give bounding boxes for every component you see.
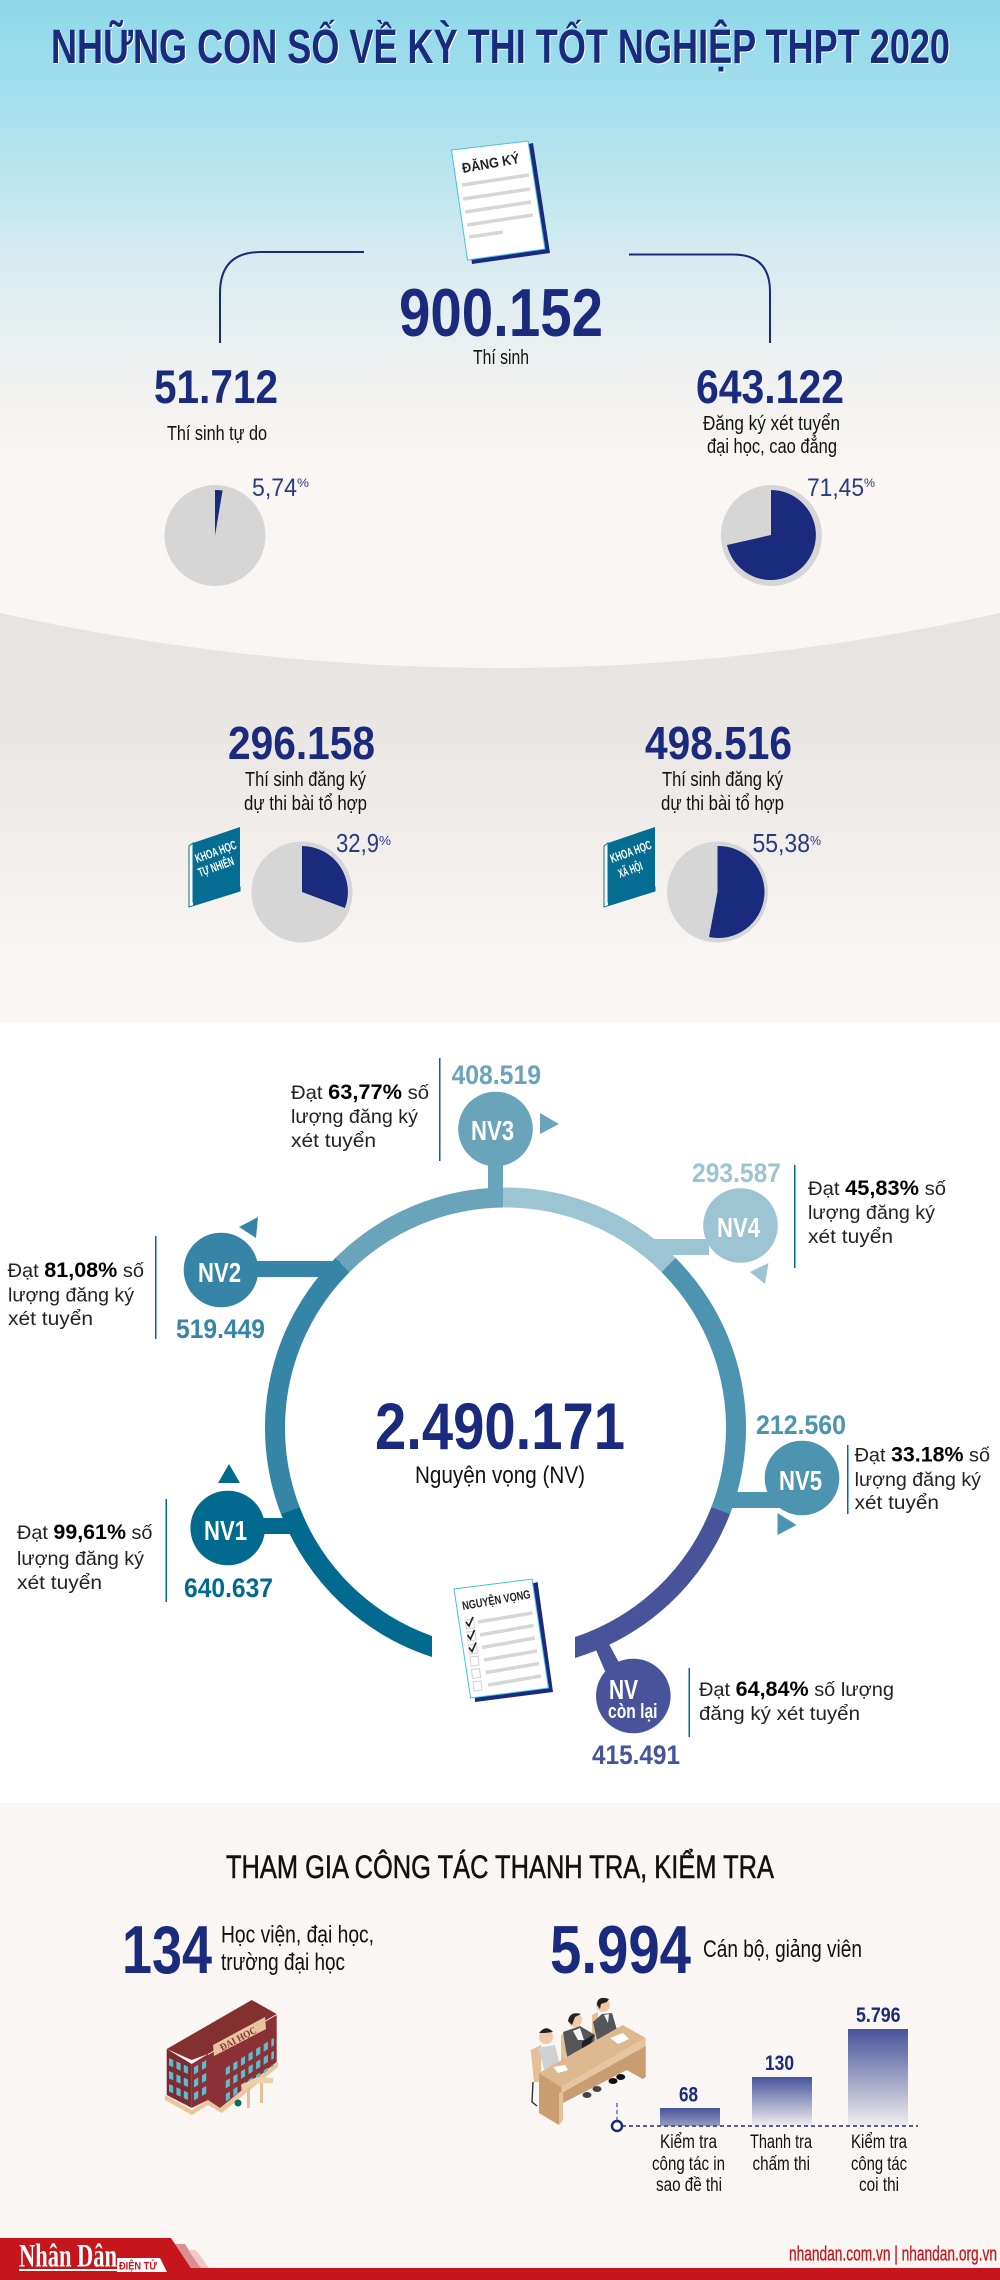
icon: book natural sciences bbox=[189, 827, 240, 907]
footer bbox=[0, 2238, 1000, 2280]
number: 134 bbox=[122, 1912, 212, 1988]
bar: supervision inspection: 5.796 bbox=[856, 2004, 900, 2027]
icon: registration document: ĐĂNG KÝ bbox=[461, 149, 521, 176]
node: remaining wishes: còn lại bbox=[608, 1701, 658, 1723]
pie chart 32,9% bbox=[252, 842, 352, 942]
number: 498.516 bbox=[645, 717, 792, 769]
percent value: % bbox=[297, 476, 309, 490]
icon: university building: ĐẠI HỌC bbox=[218, 2025, 259, 2054]
note: NV1 bbox=[17, 1521, 153, 1594]
bar: print inspection: sao đề thi bbox=[656, 2175, 722, 2196]
axis: dashed baseline bbox=[612, 2103, 918, 2131]
node: NV1: NV1 bbox=[204, 1515, 247, 1546]
panel: independent candidates bbox=[154, 360, 309, 586]
note: remaining wishes: Đạt 64,84% số lượng bbox=[699, 1678, 894, 1701]
node: remaining wishes: 415.491 bbox=[592, 1740, 680, 1770]
section background: sky gradient bbox=[0, 0, 1000, 500]
icon: book social sciences: KHOA HỌC bbox=[608, 838, 653, 866]
node: NV5: NV5 bbox=[779, 1465, 822, 1496]
icon: book social sciences bbox=[604, 827, 655, 907]
label: Thí sinh đăng ký bbox=[662, 769, 783, 791]
label: trường đại học bbox=[221, 1949, 345, 1976]
label: dự thi bài tổ hợp bbox=[661, 793, 784, 815]
percent value: % bbox=[379, 833, 391, 848]
total wishes number: 2.490.171 bbox=[375, 1389, 625, 1463]
node: NV1: 640.637 bbox=[184, 1573, 273, 1603]
note: NV5 bbox=[855, 1444, 990, 1514]
logo text: ĐIỆN TỬ bbox=[119, 2260, 158, 2272]
panel: university admission candidates bbox=[696, 360, 875, 586]
note: NV5: Đạt 33.18% số bbox=[855, 1444, 990, 1467]
bar: print inspection: công tác in bbox=[652, 2154, 725, 2175]
bar: marking inspection: 130 bbox=[765, 2052, 794, 2075]
logo text: Nhân Dân bbox=[19, 2238, 117, 2274]
label bbox=[661, 769, 784, 815]
percent value: 55,38 bbox=[752, 828, 810, 858]
total candidates number: 900.152 bbox=[399, 275, 603, 351]
ring segment NV1 bbox=[281, 1507, 432, 1657]
connector: left bracket bbox=[220, 252, 364, 343]
panel: officials bbox=[531, 1912, 918, 2196]
node: NV2 bbox=[155, 1217, 340, 1344]
note: NV1: lượng đăng ký bbox=[17, 1548, 144, 1570]
chart: wishes ring bbox=[275, 1197, 736, 1658]
note: NV4 bbox=[808, 1177, 946, 1248]
percent value: % bbox=[864, 476, 875, 490]
footer band bbox=[0, 2268, 1000, 2280]
logo stripes bbox=[175, 2244, 201, 2268]
icon: registration document bbox=[452, 141, 550, 264]
logo background bbox=[0, 2238, 191, 2268]
bar: marking inspection: Thanh tra bbox=[750, 2132, 812, 2153]
node: remaining wishes bbox=[592, 1644, 690, 1770]
note: NV4: xét tuyển bbox=[808, 1226, 893, 1248]
pie chart 71,45% bbox=[721, 485, 822, 586]
node: NV3: 408.519 bbox=[452, 1060, 541, 1090]
node: NV4: NV4 bbox=[717, 1212, 760, 1243]
total wishes label: Nguyện vọng (NV) bbox=[415, 1462, 585, 1489]
note: NV3: xét tuyển bbox=[291, 1130, 376, 1152]
number: 51.712 bbox=[154, 360, 278, 413]
bar: marking inspection: chấm thi bbox=[752, 2154, 810, 2175]
node: NV4: 293.587 bbox=[692, 1158, 781, 1188]
note: NV5: lượng đăng ký bbox=[855, 1469, 981, 1491]
icon: book natural sciences: TỰ NHIÊN bbox=[196, 853, 236, 880]
connector: right bracket bbox=[629, 254, 770, 343]
note: NV1: Đạt 99,61% số bbox=[17, 1521, 153, 1544]
node: NV5 bbox=[730, 1410, 848, 1535]
note: NV2 bbox=[8, 1259, 144, 1330]
label: Cán bộ, giảng viên bbox=[703, 1936, 862, 1963]
note: NV4: Đạt 45,83% số bbox=[808, 1177, 946, 1200]
node: NV1 bbox=[166, 1464, 300, 1603]
label: Thí sinh tự do bbox=[167, 423, 267, 445]
note: NV2: lượng đăng ký bbox=[8, 1284, 134, 1306]
pie chart 5,74% bbox=[164, 485, 266, 586]
percent value: 71,45 bbox=[807, 474, 864, 502]
label: Học viện, đại học, bbox=[221, 1922, 374, 1949]
label: đại học, cao đẳng bbox=[707, 434, 837, 458]
label: Thí sinh đăng ký bbox=[245, 769, 366, 791]
node: NV5: 212.560 bbox=[756, 1410, 846, 1440]
icon: wishes document bbox=[454, 1579, 553, 1702]
node: NV3: NV3 bbox=[471, 1115, 514, 1146]
section background: grey curved band bbox=[0, 613, 1000, 1020]
bar: print inspection: 68 bbox=[679, 2084, 698, 2106]
number: 296.158 bbox=[228, 717, 375, 769]
node: NV3 bbox=[439, 1058, 559, 1200]
panel: universities bbox=[122, 1912, 374, 2115]
note: NV1: xét tuyển bbox=[17, 1572, 102, 1594]
panel: natural sciences combination bbox=[189, 717, 391, 942]
icon: university building bbox=[165, 2000, 278, 2115]
icon: wishes document: NGUYỆN VỌNG bbox=[461, 1586, 531, 1613]
percent value: 32,9 bbox=[336, 828, 379, 858]
note: NV4: lượng đăng ký bbox=[808, 1202, 935, 1224]
number: 5.994 bbox=[550, 1912, 691, 1988]
ring segment NV3 bbox=[342, 1198, 503, 1265]
ring segment NV5 bbox=[668, 1265, 736, 1511]
note: NV2: xét tuyển bbox=[8, 1308, 93, 1330]
panel: registration bbox=[220, 141, 770, 369]
node: NV2: 519.449 bbox=[176, 1314, 265, 1344]
ring segment NV4 bbox=[503, 1197, 668, 1265]
percent value: 5,74 bbox=[252, 474, 297, 502]
total candidates label: Thí sinh bbox=[473, 347, 529, 369]
label bbox=[244, 769, 367, 815]
label bbox=[221, 1922, 374, 1976]
label: Đăng ký xét tuyển bbox=[703, 413, 840, 435]
pie chart 55,38% bbox=[667, 842, 768, 942]
section background: white middle bbox=[0, 1022, 1000, 1803]
node: NV4 bbox=[654, 1158, 796, 1284]
note: remaining wishes bbox=[699, 1678, 894, 1725]
bar: print inspection bbox=[652, 2084, 725, 2196]
bar: supervision inspection bbox=[848, 2004, 908, 2196]
ring segment remaining wishes bbox=[575, 1507, 730, 1658]
note: NV2: Đạt 81,08% số bbox=[8, 1259, 144, 1282]
note: NV3 bbox=[291, 1081, 429, 1152]
bar: marking inspection bbox=[750, 2052, 812, 2175]
number: 643.122 bbox=[696, 360, 844, 413]
node: NV2: NV2 bbox=[198, 1257, 241, 1288]
panel: social sciences combination bbox=[604, 717, 821, 942]
node: remaining wishes: NV bbox=[609, 1674, 638, 1705]
note: NV3: lượng đăng ký bbox=[291, 1106, 418, 1128]
ring segment NV2 bbox=[275, 1265, 342, 1511]
note: NV5: xét tuyển bbox=[855, 1492, 939, 1514]
label: dự thi bài tổ hợp bbox=[244, 793, 367, 815]
bar: print inspection: Kiểm tra bbox=[660, 2132, 717, 2153]
icon: officials at a desk bbox=[531, 1998, 646, 2125]
icon: book natural sciences: KHOA HỌC bbox=[193, 838, 238, 866]
bar: supervision inspection: công tác bbox=[851, 2154, 907, 2175]
bar: supervision inspection: Kiểm tra bbox=[851, 2132, 907, 2153]
note: remaining wishes: đăng ký xét tuyển bbox=[699, 1703, 860, 1725]
bar: supervision inspection: coi thi bbox=[859, 2175, 899, 2196]
note: NV3: Đạt 63,77% số bbox=[291, 1081, 429, 1104]
icon: book social sciences: XÃ HỘI bbox=[616, 858, 645, 881]
label bbox=[703, 413, 840, 458]
heading: inspection: THAM GIA CÔNG TÁC THANH TRA, KIỂM TRA bbox=[226, 1849, 775, 1885]
percent value: % bbox=[810, 833, 821, 848]
